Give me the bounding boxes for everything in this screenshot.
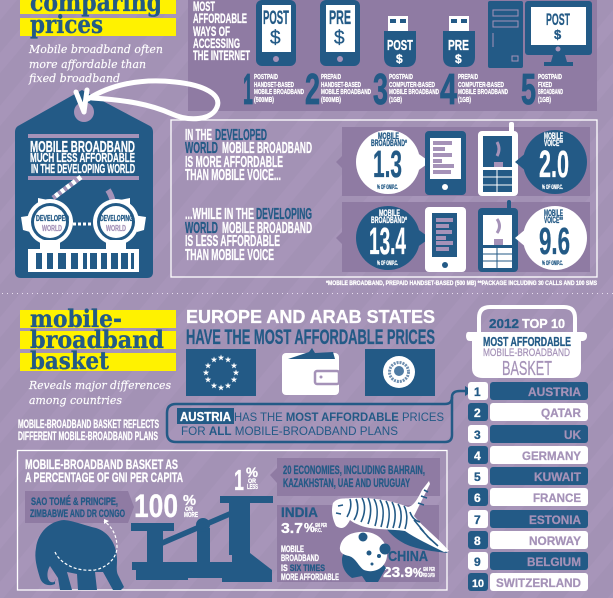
row 5: 5: [474, 470, 481, 484]
tag heading: MUCH LESS AFFORDABLE: [30, 151, 135, 165]
icon: smartphone: [425, 131, 466, 195]
label: 1 percent economies: KAZAKHSTAN, UAE AND URUGUAY: [283, 476, 410, 490]
stat: 1 percent or less: 1: [234, 465, 244, 497]
developing text: DEVELOPING: [256, 206, 312, 223]
basket description: DIFFERENT MOBILE-BROADBAND PLANS: [18, 429, 158, 443]
stat: 100 percent or more: 100: [134, 488, 178, 524]
basket: 2012 top 10 heading: [466, 307, 587, 380]
bubble: mobile broadband 13.4: BROADBAND*: [371, 215, 407, 225]
text: six times more affordable: BROADBAND: [281, 553, 319, 563]
rank 1: [243, 65, 304, 114]
rank 3: POSTPAID: [389, 72, 413, 81]
chart title: A PERCENTAGE OF GNI PER CAPITA: [25, 469, 183, 485]
row 8: 8: [474, 534, 481, 548]
icon: EU flag: ★: [211, 382, 217, 390]
icon: EU flag: ★: [225, 356, 231, 364]
icon: prepaid usb modem: PRE: [448, 37, 469, 54]
developing text: MOBILE BROADBAND: [222, 220, 312, 237]
icon: EU flag: ★: [211, 356, 217, 364]
basket description: [18, 417, 159, 443]
text: six times more affordable: MORE AFFORDABLE: [281, 572, 339, 582]
bubble: mobile broadband 1.3: % OF GNIP.C.: [377, 184, 398, 191]
row 3: UK: [564, 428, 581, 442]
china stat: 23.9: [383, 564, 413, 581]
row 3: 3: [474, 428, 481, 442]
row 6: FRANCE: [533, 491, 581, 505]
china stat: %: [413, 565, 423, 580]
rank 5: (1GB): [538, 95, 551, 104]
row 2: QATAR: [541, 406, 581, 420]
bubble: mobile broadband 1.3: [356, 130, 430, 194]
bubble: mobile voice 2.0: VOICE**: [544, 138, 563, 148]
row 8: NORWAY: [529, 534, 581, 548]
panel: india and china: [277, 504, 439, 582]
icon: panda: [340, 532, 390, 582]
icon: handcuffs: DEVELOPED: [36, 214, 69, 223]
icon: EU flag: [186, 349, 256, 396]
heading: mobile-broadband basket: [20, 304, 176, 375]
row 9: 9: [474, 555, 481, 569]
basket: 2012 top 10 heading: TOP 10: [522, 316, 565, 331]
bubble: mobile broadband 1.3: MOBILE: [378, 131, 399, 141]
icon: desktop computer: POST: [546, 10, 570, 29]
rank 1: HANDSET-BASED: [254, 80, 294, 89]
subtitle: basket: Reveals major differences: [28, 378, 171, 392]
rank 4: [440, 65, 508, 114]
developed text: WORLD: [185, 140, 218, 157]
row 5: [468, 467, 588, 485]
stat: 1 percent or less: %: [246, 464, 259, 480]
text: six times more affordable: MOBILE: [281, 544, 304, 554]
icon: handcuffs: DEVELOPING: [100, 214, 133, 223]
heading: mobile-broadband basket: broadband: [30, 325, 164, 354]
basket: 2012 top 10 heading: 2012: [489, 316, 519, 331]
subtitle: comparing prices: more affordable than: [29, 57, 146, 71]
bubble: mobile voice 9.6: MOBILE: [544, 208, 563, 218]
icon: handcuffs: WORLD: [106, 224, 126, 233]
row 6: 6: [474, 491, 481, 505]
rank 3: 3: [373, 65, 388, 114]
rank 3: [373, 65, 439, 114]
developing text: [185, 206, 312, 264]
panel heading: ACCESSING: [193, 35, 240, 51]
panel heading: WAYS OF: [193, 23, 230, 39]
tag heading: MOBILE BROADBAND: [30, 139, 135, 156]
row 1: [468, 382, 588, 400]
subtitle: comparing prices: fixed broadband: [28, 71, 120, 85]
icon: postpaid usb modem: [384, 16, 416, 67]
icon: postpaid phone: POST: [263, 8, 289, 29]
heading: europe and arab states: [186, 307, 435, 349]
icon: prepaid phone: $: [334, 28, 345, 49]
panel: india and china: PER CAPITA: [423, 573, 435, 579]
row 7: ESTONIA: [529, 513, 581, 527]
panel heading: [193, 0, 250, 63]
row 6: [468, 488, 588, 506]
bubble: mobile broadband 13.4: 13.4: [369, 221, 406, 263]
bubble: mobile voice 2.0: MOBILE: [544, 131, 563, 141]
icon: EU flag: ★: [205, 376, 211, 384]
developed text: DEVELOPED: [215, 127, 267, 144]
india stat: [281, 504, 327, 537]
developed text: MOBILE BROADBAND: [222, 140, 312, 157]
row 8: [468, 531, 588, 549]
row 4: [468, 446, 588, 464]
developed text: [185, 127, 312, 184]
label: 100 percent economies: [25, 491, 134, 523]
basket: 2012 top 10 heading: BASKET: [502, 358, 552, 380]
tag heading: IN THE DEVELOPING WORLD: [31, 162, 135, 176]
icon: EU flag: ★: [218, 384, 224, 392]
bubble: mobile voice 2.0: 2.0: [539, 144, 569, 186]
stat: 100 percent or more: OR: [185, 507, 194, 513]
rank 5: [521, 65, 563, 114]
rank 2: (500MB): [321, 95, 341, 104]
label: 100 percent economies: ZIMBABWE AND DR CONGO: [30, 508, 125, 520]
rank 5: BROADBAND: [538, 87, 563, 96]
row 2: [468, 403, 588, 421]
icon: prepaid phone: PRE: [329, 8, 351, 29]
row 7: [468, 510, 588, 528]
row 3: [468, 425, 588, 443]
row 7: 7: [474, 513, 481, 527]
rank 4: 4: [440, 65, 457, 114]
tag heading: [30, 139, 135, 176]
icon: postpaid usb modem: POST: [387, 37, 413, 54]
stat: 100 percent or more: MORE: [184, 512, 198, 519]
rank 2: 2: [305, 65, 320, 114]
row 10: [468, 573, 588, 591]
row 9: [468, 552, 588, 570]
stat: 1 percent or less: LESS: [247, 484, 258, 491]
rank 2: [305, 65, 371, 114]
icon: EU flag: ★: [231, 376, 237, 384]
subtitle: comparing prices: Mobile broadband often: [28, 42, 163, 56]
basket: 2012 top 10 heading: MOBILE-BROADBAND: [483, 347, 570, 359]
india stat: GNI PER: [315, 523, 327, 529]
bubble: mobile broadband 1.3: BROADBAND*: [371, 138, 407, 148]
developing text: ...WHILE IN THE: [185, 206, 254, 223]
row: developed: [336, 122, 590, 196]
basket description: MOBILE-BROADBAND BASKET REFLECTS: [18, 417, 159, 431]
icon: prepaid usb modem: $: [455, 52, 462, 66]
panel heading: AFFORDABLE: [193, 10, 247, 26]
heading: mobile-broadband basket: basket: [30, 346, 109, 375]
heading: comparing prices: [20, 0, 176, 39]
stat: 1 percent or less: OR: [248, 479, 257, 485]
bubble: mobile voice 9.6: 9.6: [539, 221, 570, 263]
icon: elephant: [35, 519, 124, 590]
label: 1 percent economies: [270, 458, 440, 496]
panel: developed vs developing comparison: [171, 120, 597, 277]
rank 3: MOBILE BROADBAND: [389, 87, 439, 96]
subtitle: basket: [28, 378, 171, 407]
icon: desktop computer: $: [554, 27, 562, 42]
callout: austria with arrow: [167, 386, 473, 442]
price tag: mobile broadband less affordable in developing world: [15, 90, 153, 278]
rank 2: MOBILE BROADBAND: [321, 87, 371, 96]
label: 100 percent economies: SAO TOMÉ & PRINCIPE,: [31, 495, 118, 508]
row 4: GERMANY: [522, 449, 581, 463]
rank 3: COMPUTER-BASED: [389, 80, 435, 89]
row 9: BELGIUM: [527, 555, 581, 569]
rank 1: MOBILE BROADBAND: [254, 87, 304, 96]
text: six times more affordable: IS SIX TIMES: [281, 563, 325, 573]
bubble: mobile voice 2.0: [515, 130, 587, 194]
row 4: 4: [474, 449, 481, 463]
rank 1: (500MB): [254, 95, 274, 104]
icon: arab league emblem: [365, 349, 435, 396]
icon: tiger: [332, 481, 449, 553]
rank 5: 5: [521, 65, 536, 114]
subtitle: basket: among countries: [29, 393, 122, 407]
china stat: CHINA: [388, 548, 428, 565]
icon: balance scale: [131, 496, 273, 582]
icon: EU flag: ★: [225, 382, 231, 390]
bubble: mobile voice 2.0: % OF GNIP.C.: [542, 184, 563, 191]
icon: prepaid phone: [320, 0, 360, 66]
rank 4: MOBILE BROADBAND: [458, 87, 508, 96]
developing text: THAN MOBILE VOICE: [185, 247, 274, 264]
developed text: IS MORE AFFORDABLE: [185, 154, 283, 171]
bubble: mobile broadband 13.4: % OF GNIP.C.: [377, 260, 398, 267]
icon: wallet: [282, 348, 339, 395]
bubble: mobile voice 9.6: % OF GNIP.C.: [542, 260, 563, 267]
stat: 1 percent or less: [234, 464, 259, 497]
basket: 2012 top 10 heading: MOST AFFORDABLE: [483, 334, 571, 349]
heading: mobile-broadband basket: mobile-: [30, 304, 122, 333]
text: six times more affordable: [281, 544, 339, 582]
developing text: WORLD: [185, 220, 218, 237]
icon: mobile phone: [478, 122, 518, 196]
label: 1 percent economies: 20 ECONOMIES, INCLUDING BAHRAIN,: [283, 463, 425, 477]
developed text: THAN MOBILE VOICE...: [185, 167, 281, 184]
icon: postpaid phone: $: [270, 28, 281, 49]
icon: prepaid usb modem: [443, 16, 475, 67]
panel: basket as percentage of GNI per capita: [18, 450, 449, 590]
rank 4: PREPAID: [458, 72, 478, 81]
row 10: SWITZERLAND: [496, 576, 581, 590]
rank 3: (1GB): [389, 95, 402, 104]
icon: EU flag: ★: [233, 369, 239, 377]
rank 5: POSTPAID: [538, 72, 562, 81]
chart title: MOBILE-BROADBAND BASKET AS: [25, 456, 178, 472]
row: developing: [336, 200, 590, 272]
icon: EU flag: ★: [203, 369, 209, 377]
ranking list: [468, 382, 588, 591]
bubble: mobile broadband 13.4: MOBILE: [379, 208, 400, 218]
row 1: 1: [474, 385, 481, 399]
heading: europe and arab states: EUROPE AND ARAB STATES: [186, 307, 435, 327]
icon: EU flag: ★: [218, 354, 224, 362]
callout: austria with arrow: AUSTRIA: [180, 410, 231, 424]
row 10: 10: [472, 578, 484, 590]
rank 4: (1GB): [458, 95, 471, 104]
icon: EU flag: ★: [231, 362, 237, 370]
china stat: [383, 548, 435, 581]
rank 1: 1: [243, 65, 253, 114]
row 2: 2: [474, 406, 481, 420]
chart title: [25, 456, 183, 485]
developing text: IS LESS AFFORDABLE: [185, 233, 280, 250]
stat: 100 percent or more: %: [183, 492, 196, 509]
tag string: [76, 81, 218, 119]
icon: postpaid usb modem: $: [396, 52, 403, 66]
heading: europe and arab states: HAVE THE MOST AFFORDABLE PRICES: [186, 326, 435, 349]
india stat: INDIA: [281, 504, 318, 520]
bubble: mobile broadband 1.3: 1.3: [373, 144, 402, 186]
icon: desktop computer: [488, 1, 592, 68]
rank 4: COMPUTER-BASED: [458, 80, 504, 89]
icon: handcuffs: WORLD: [42, 224, 62, 233]
row 5: KUWAIT: [534, 470, 582, 484]
bubble: mobile voice 9.6: [515, 206, 587, 270]
rank 2: HANDSET-BASED: [321, 80, 361, 89]
bubble: mobile voice 9.6: VOICE**: [544, 215, 563, 225]
rank 5: FIXED: [538, 80, 552, 89]
india stat: 3.7: [281, 520, 303, 537]
icon: handcuffs: [21, 177, 146, 272]
icon: smartphone: [425, 207, 466, 272]
icon: postpaid phone: [256, 0, 296, 66]
callout: austria with arrow: FOR ALL MOBILE-BROADBAND PLANS: [181, 424, 398, 438]
panel: most affordable ways of accessing the internet: [188, 0, 597, 114]
callout: austria with arrow: HAS THE MOST AFFORDABLE PRICES: [234, 410, 444, 424]
heading: comparing prices: prices: [30, 10, 103, 39]
rank 1: POSTPAID: [254, 72, 278, 81]
developed text: IN THE: [185, 127, 212, 144]
china stat: GNI PER: [423, 567, 435, 573]
bubble: mobile broadband 13.4: [356, 206, 430, 270]
subtitle: comparing prices: [28, 42, 163, 85]
india stat: P.C.: [315, 528, 322, 534]
panel heading: THE INTERNET: [193, 47, 250, 63]
icon: mobile phone: [478, 200, 518, 272]
icon: EU flag: ★: [205, 362, 211, 370]
india stat: %: [304, 520, 315, 535]
rank 2: PREPAID: [321, 72, 341, 81]
row 1: AUSTRIA: [528, 385, 581, 399]
